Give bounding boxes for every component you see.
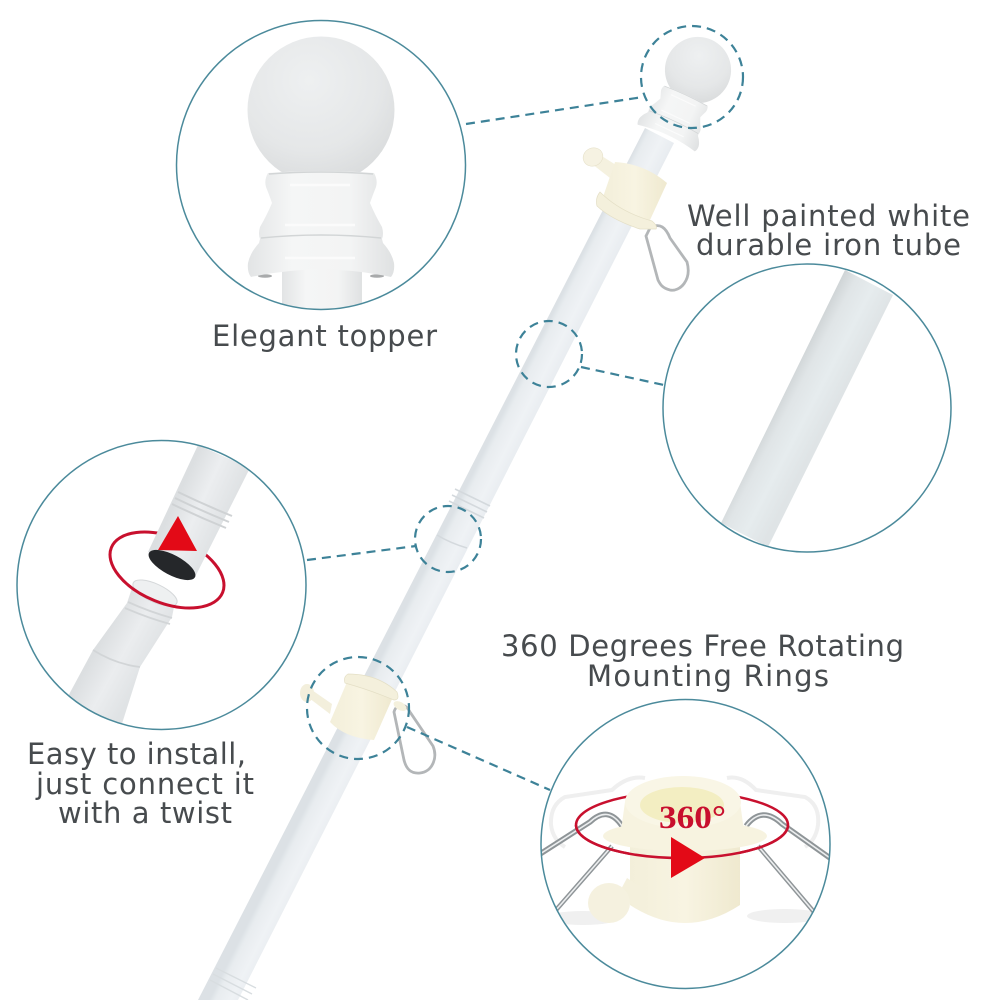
label: iron tube [687,199,970,262]
lower carabiner [394,705,435,773]
label: free rotating rings [501,629,904,693]
front of red ellipse [576,825,788,858]
ghost carabiners [551,778,818,847]
label: iron tube: Well painted white [687,199,970,233]
label: easy to install [27,737,254,830]
panel: iron tube circle [663,264,951,552]
thumb screw [588,878,630,923]
panel: twist connection circle [17,440,306,730]
dashed connector: rotating ring [307,657,550,790]
soft shadows [560,911,606,925]
label: iron tube: durable iron tube [696,228,961,262]
upper ring thumb screw [580,145,616,178]
panel: rotating ring circle [540,700,830,988]
label: free rotating rings: 360 Degrees Free Rotating [501,629,904,663]
upper carabiner [646,226,688,290]
lower mounting ring [300,674,435,773]
upper tube section [144,445,250,586]
label: easy to install: with a twist [58,796,232,830]
label: elegant topper: Elegant topper [212,319,437,353]
red rotation ellipse [99,517,235,623]
cream ring body [603,776,767,923]
main flagpole [198,128,674,1000]
upper mounting ring [580,145,688,290]
red arrow head [671,837,705,878]
topper close-up [248,36,394,313]
lower ring thumb screw [300,684,332,714]
label: easy to install: Easy to install, [27,737,246,771]
lower ring collar [330,682,393,740]
dashed connector: topper [466,26,743,128]
dashed connector: iron tube [516,321,664,387]
wire clips [540,814,830,858]
finial on pole [636,26,742,152]
back of red ellipse [576,792,788,858]
dashed connector: twist joint [307,506,481,572]
360 degrees label: 360° [659,800,726,836]
label: easy to install: just connect it [35,767,254,801]
red arrow head [158,516,197,551]
upper ring collar [603,162,667,220]
panel: elegant topper circle [176,20,466,313]
lower tube section [69,580,178,723]
tube close-up [721,270,893,547]
label: free rotating rings: Mounting Rings [587,659,829,693]
